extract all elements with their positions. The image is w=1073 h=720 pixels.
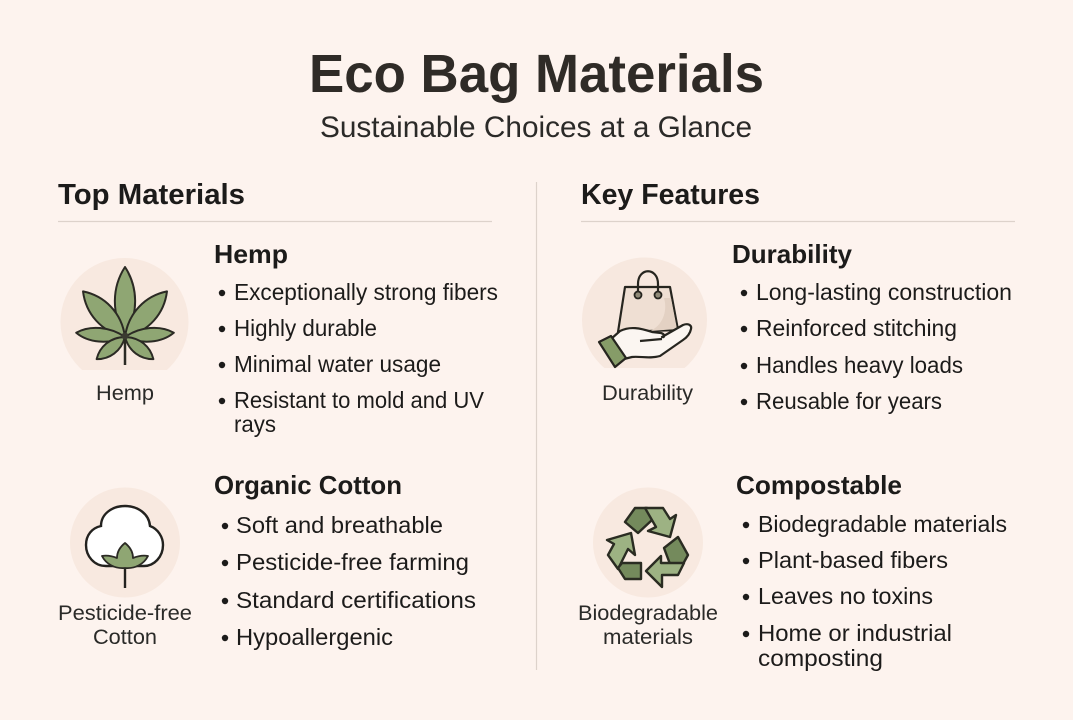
icon: recycling arrows xyxy=(593,488,703,598)
text block: hemp: rays xyxy=(234,411,276,437)
text block: compostable: Compostable xyxy=(736,470,902,500)
icon label: biodegradable materials: Biodegradable xyxy=(578,602,718,625)
text block: compostable: Home or industrial xyxy=(758,620,952,646)
text block: compostable: Biodegradable materials xyxy=(758,511,1007,537)
text block: hemp xyxy=(214,239,498,437)
icon label: biodegradable materials xyxy=(578,602,718,649)
text block: durability: Reusable for years xyxy=(756,388,942,414)
text block: hemp: Minimal water usage xyxy=(234,351,441,377)
text block: durability: Reinforced stitching xyxy=(756,315,957,341)
text block: durability: Handles heavy loads xyxy=(756,352,963,378)
text block: hemp: Exceptionally strong fibers xyxy=(234,279,498,305)
text block: compostable xyxy=(736,470,1007,671)
icon: hemp leaf xyxy=(60,258,188,370)
icon: cotton boll xyxy=(70,488,180,598)
icon label: durability: Durability xyxy=(602,382,694,405)
text block: durability: Durability xyxy=(732,239,853,269)
text block: durability: Long-lasting construction xyxy=(756,279,1012,305)
heading: top materials: Top Materials xyxy=(58,179,245,211)
title: Eco Bag Materials xyxy=(309,44,764,104)
icon label: pesticide-free cotton xyxy=(58,602,192,649)
text block: organic cotton: Hypoallergenic xyxy=(236,624,393,650)
icon label: biodegradable materials: materials xyxy=(603,626,693,649)
panel: top materials xyxy=(58,179,498,650)
panel: key features xyxy=(578,179,1015,671)
icon label: hemp: Hemp xyxy=(96,382,154,405)
text block: durability xyxy=(732,239,1012,414)
text block: organic cotton xyxy=(214,470,476,650)
text block: hemp: Resistant to mold and UV xyxy=(234,387,485,413)
text block: hemp: Highly durable xyxy=(234,315,377,341)
text block: organic cotton: Organic Cotton xyxy=(214,470,402,500)
heading: key features: Key Features xyxy=(581,179,760,211)
text block: compostable: composting xyxy=(758,645,883,671)
subtitle: Sustainable Choices at a Glance xyxy=(320,111,752,144)
icon label: pesticide-free cotton: Cotton xyxy=(93,626,157,649)
text block: compostable: Leaves no toxins xyxy=(758,583,933,609)
text block: organic cotton: Pesticide-free farming xyxy=(236,549,469,575)
text block: organic cotton: Soft and breathable xyxy=(236,512,443,538)
text block: hemp: Hemp xyxy=(214,239,288,269)
icon: hand holding bag xyxy=(582,258,707,368)
text block: compostable: Plant-based fibers xyxy=(758,547,948,573)
icon label: pesticide-free cotton: Pesticide-free xyxy=(58,602,192,625)
text block: organic cotton: Standard certifications xyxy=(236,587,476,613)
